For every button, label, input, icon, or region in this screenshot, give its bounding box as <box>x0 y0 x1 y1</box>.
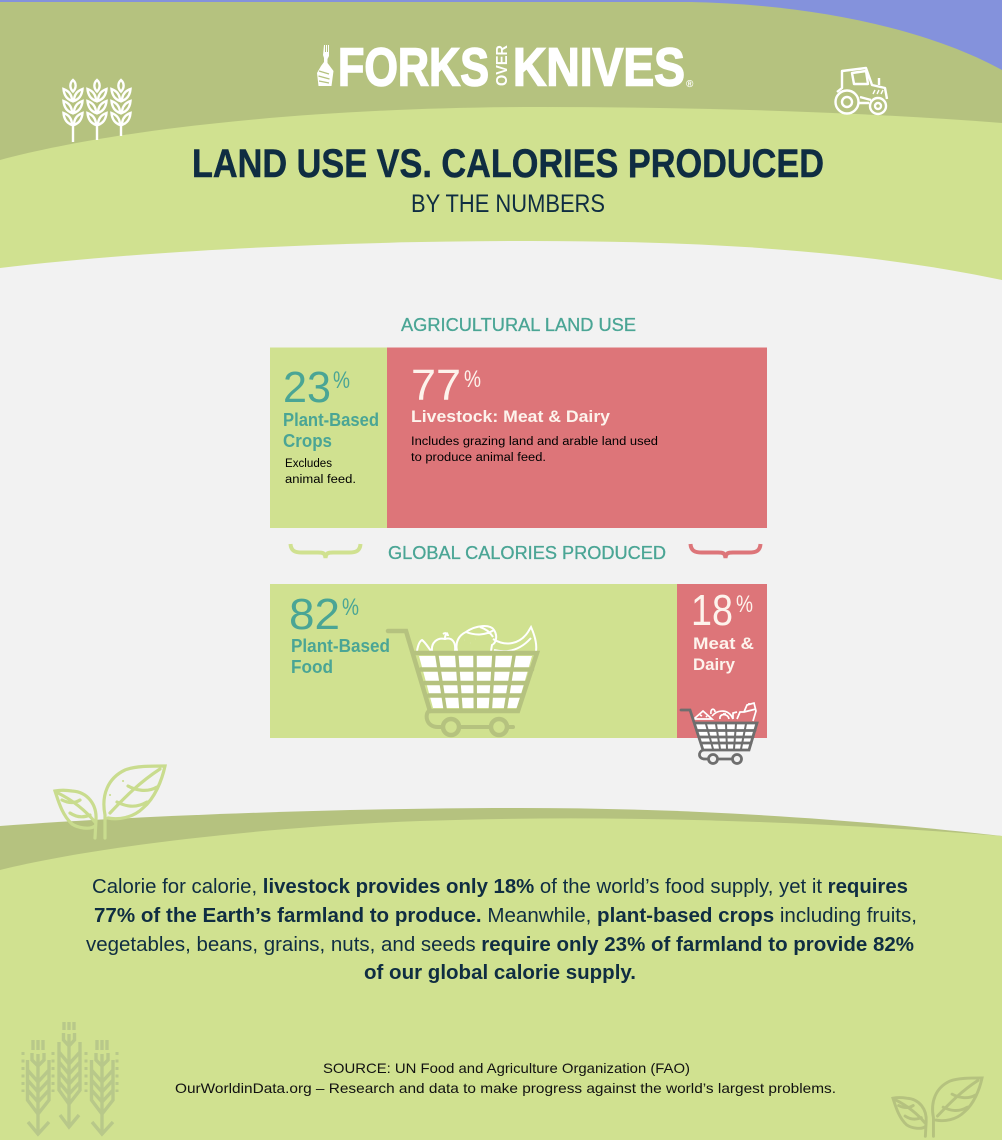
logo word knives: KNIVES <box>513 38 685 98</box>
note second line: to produce animal feed. <box>411 452 546 464</box>
stat percent sign: % <box>333 367 350 394</box>
title: LAND USE VS. CALORIES PRODUCED <box>192 142 824 186</box>
label: livestock: Livestock: Meat & Dairy <box>411 407 611 426</box>
icon: sprout top <box>55 766 165 838</box>
label: plant-based food: Plant-Based <box>291 636 390 656</box>
label: meat and dairy: Meat & <box>693 634 754 653</box>
icon: wheat stalks <box>64 80 130 142</box>
cart wheels <box>443 719 507 735</box>
header sky <box>0 0 1002 290</box>
icon: sprout bottom right <box>893 1078 982 1136</box>
panel: calories meat and dairy <box>677 584 767 738</box>
panel: calories plant-based <box>270 584 677 738</box>
panel: land use livestock <box>387 348 767 528</box>
stat: 82 percent: 82 <box>289 590 340 639</box>
icon: tractor <box>836 68 887 114</box>
source line 1: SOURCE: UN Food and Agriculture Organization (FAO) <box>323 1060 690 1076</box>
logo word over: OVER <box>494 45 511 86</box>
stat percent sign: % <box>464 366 481 393</box>
icon: small cart with meat and dairy <box>681 703 757 764</box>
paragraph <box>86 875 917 984</box>
cart frame <box>681 710 757 759</box>
footer front hill <box>0 818 1002 1140</box>
icon: large cart with produce <box>388 626 537 735</box>
label second line: Dairy <box>693 655 736 674</box>
stat: 77 percent: 77 <box>411 361 461 410</box>
basket fill <box>419 656 532 708</box>
note second line: animal feed. <box>285 474 356 486</box>
logo <box>317 38 694 98</box>
bracket: red <box>690 544 760 558</box>
food outlines <box>695 703 756 721</box>
paragraph line 2: 77% of the Earth’s farmland to produce. Meanwhile, plant-based crops including fruits, <box>94 904 917 927</box>
subtitle: BY THE NUMBERS <box>411 190 605 218</box>
note: includes: Includes grazing land and arable land used <box>411 436 658 448</box>
note: excludes: Excludes <box>285 458 332 470</box>
header front hill <box>0 107 1002 290</box>
paragraph line 1: Calorie for calorie, livestock provides only 18% of the world’s food supply, yet it requires <box>92 875 908 898</box>
header back hill <box>0 2 1002 290</box>
cart wheels <box>708 754 742 764</box>
stat percent sign: % <box>736 591 753 618</box>
basket fill <box>695 724 756 749</box>
bracket: green <box>290 544 360 558</box>
stat percent sign: % <box>342 594 359 621</box>
panel: land use plant-based <box>270 348 387 528</box>
cart frame <box>388 631 537 727</box>
icon: wheat bottom left <box>23 1022 117 1135</box>
heading: agricultural land use: AGRICULTURAL LAND USE <box>401 315 636 335</box>
paragraph line 3: vegetables, beans, grains, nuts, and seeds require only 23% of farmland to provide 82% <box>86 933 914 956</box>
produce outlines <box>417 626 536 651</box>
footer back hill <box>0 808 1002 1140</box>
heading: global calories produced: GLOBAL CALORIES PRODUCED <box>388 543 666 563</box>
label second line: Crops <box>283 431 332 451</box>
label: plant-based crops: Plant-Based <box>283 410 379 430</box>
logo word forks: FORKS <box>338 38 489 98</box>
logo registered mark: ® <box>686 79 694 90</box>
icon: carrot fork <box>317 45 334 86</box>
paragraph line 4: of our global calorie supply. <box>364 961 636 984</box>
source line 2: OurWorldinData.org – Research and data to make progress against the world’s largest problems. <box>175 1080 836 1096</box>
stat: 18 percent: 18 <box>691 586 733 635</box>
label second line: Food <box>291 657 333 677</box>
content background <box>0 241 1002 800</box>
stat: 23 percent: 23 <box>283 363 331 412</box>
